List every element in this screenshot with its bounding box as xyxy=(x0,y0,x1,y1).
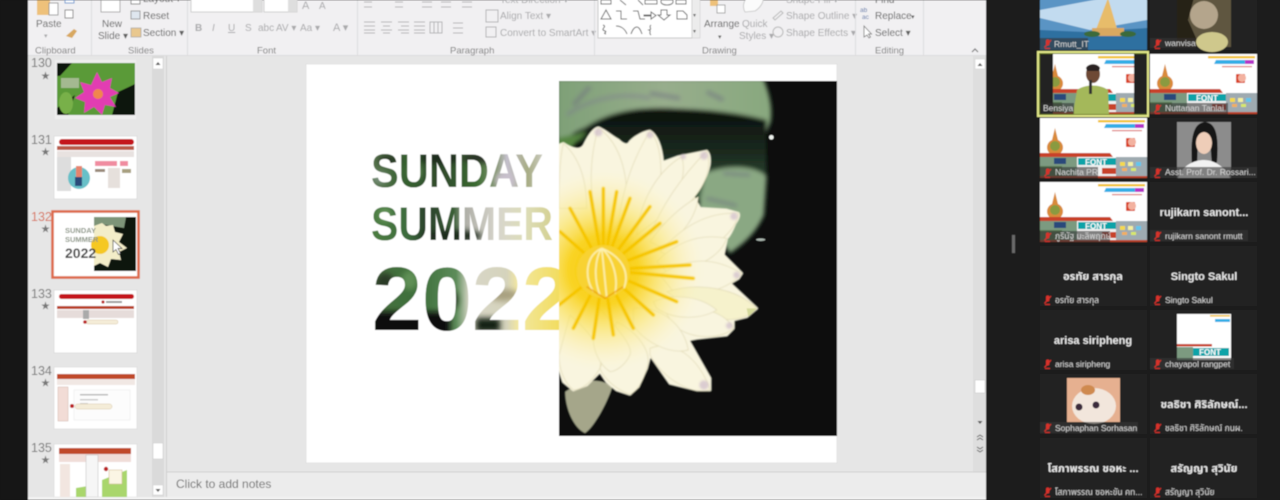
editing group: Editing xyxy=(875,46,904,56)
tile: Thai name 2: ชลธิชา ศิริลักษณ์... xyxy=(1160,399,1248,411)
notes bar xyxy=(167,472,986,497)
tile: Thai name 4: สรัญญา สุวินัย xyxy=(1170,463,1238,475)
editing group: Replace xyxy=(875,11,912,22)
thumbnail 135: ribbon tutorial slide: 135 xyxy=(31,441,52,455)
thumbnail 134: ribbon tutorial slide: 134 xyxy=(31,364,52,378)
tile: rujikarn sanont rmutt xyxy=(1150,182,1257,242)
headline with photo fill: SUMMER xyxy=(371,197,553,250)
tile: chayapol rangpet xyxy=(1150,310,1257,370)
thumbnail 130: pink lotus: ★ xyxy=(41,71,50,81)
drawing group: shapes gallery: Shape Effects ▾ xyxy=(786,28,856,39)
tile: Rmutt_IT: Rmutt_IT xyxy=(1054,39,1089,49)
slides group: Reset xyxy=(143,11,169,22)
tile: arisa siripheng xyxy=(1040,310,1147,370)
font group: I xyxy=(212,23,215,34)
thumbnail 134: ribbon tutorial slide: ★ xyxy=(41,378,50,388)
petals xyxy=(559,128,757,394)
tile: rujikarn sanont rmutt: rujikarn sanont rmutt xyxy=(1165,231,1243,241)
clipboard group: Paste xyxy=(36,19,62,30)
editing group xyxy=(860,0,978,56)
font group: U xyxy=(228,23,235,34)
slide: Sunday Summer 2022 xyxy=(306,64,837,463)
thumbnail 135: ribbon tutorial slide: ★ xyxy=(41,455,50,465)
right scrollbar xyxy=(973,56,986,472)
drawing group: shapes gallery: Arrange xyxy=(704,19,740,30)
font group xyxy=(191,0,349,56)
tile: Nachita PR: FONT xyxy=(1085,158,1107,167)
font group: Font xyxy=(257,46,276,56)
font group: S xyxy=(245,23,252,34)
drawing group: shapes gallery: Shape Outline ▾ xyxy=(786,11,857,22)
thumbnail 133: red header slide xyxy=(31,287,137,353)
tile: Singto Sakul: Singto Sakul xyxy=(1171,271,1237,283)
tile: Singto Sakul xyxy=(1150,246,1257,306)
thumbnail 131: red header slide xyxy=(31,133,137,199)
editing canvas xyxy=(28,56,986,500)
paragraph group xyxy=(364,0,596,56)
thumbnail 131: red header slide: 131 xyxy=(31,133,52,147)
left scrollbar xyxy=(153,58,163,495)
editing group: ab xyxy=(860,7,868,14)
slides group: New xyxy=(102,19,123,30)
tile: Rmutt_IT xyxy=(1040,0,1147,50)
leaf xyxy=(557,78,771,253)
slides group: Section ▾ xyxy=(143,28,184,39)
tile: arisa siripheng: arisa siripheng xyxy=(1055,359,1111,369)
tile: Thai name 4 xyxy=(1150,438,1257,498)
ribbon xyxy=(28,0,986,56)
tile: participant slide share: ภูรินัฐ มะลิพฤกษ์ xyxy=(1055,231,1112,242)
font group: A xyxy=(302,0,310,12)
tile: chayapol rangpet: FONT xyxy=(1199,348,1221,357)
headline with photo fill: SUNDAY xyxy=(371,144,543,197)
thumbnail 132: selected slide: ★ xyxy=(41,224,50,234)
thumbnail 132: selected slide: SUNDAY xyxy=(65,226,96,235)
editing group: Select ▾ xyxy=(875,28,911,39)
paragraph group: Paragraph xyxy=(450,46,494,56)
headline with photo fill: 2022 xyxy=(372,250,572,350)
editing group: ac xyxy=(862,14,870,21)
editing group: ▾ xyxy=(911,14,915,21)
thumbnail 134: ribbon tutorial slide xyxy=(31,364,137,429)
tile: participant slide share xyxy=(1040,182,1147,242)
tile: Singto Sakul: Singto Sakul xyxy=(1165,295,1213,305)
font group: AV ▾ xyxy=(276,23,296,34)
thumbnail 132: selected slide: SUMMER xyxy=(65,235,99,244)
drawing group: shapes gallery: ▾ xyxy=(718,34,722,41)
thumbnail 132: selected slide: 132 xyxy=(31,210,52,224)
tile: Sophaphan Sorhasan xyxy=(1040,374,1147,434)
tile: wanvisa: wanvisa xyxy=(1164,38,1196,48)
tile: Nuttanan Tanlai: Nuttanan Tanlai xyxy=(1165,103,1224,113)
thumbnail 132: selected slide: 2022 xyxy=(65,245,96,261)
tile: Thai name 2 xyxy=(1150,374,1257,434)
tile: Thai name 3 xyxy=(1040,438,1147,498)
tile: Thai name 3: โสภาพรรณ ซอหะขัน คท... xyxy=(1055,487,1142,497)
drawing group: shapes gallery: ▾ xyxy=(693,29,696,35)
sepal xyxy=(565,380,613,433)
font group: Aa ▾ xyxy=(300,23,320,34)
tile: participant slide share: FONT xyxy=(1085,222,1107,231)
headline with photo fill xyxy=(371,144,572,350)
font group: abc xyxy=(258,23,274,34)
tile: Thai name 1: อรทัย สารกุล xyxy=(1055,295,1099,305)
tile: wanvisa xyxy=(1150,0,1257,52)
paragraph group: Align Text ▾ xyxy=(500,11,551,22)
tile: Nuttanan Tanlai xyxy=(1150,54,1257,114)
tile: Nachita PR xyxy=(1040,118,1147,178)
tile: Thai name 4: สรัญญา สุวินัย xyxy=(1165,487,1215,497)
yellow heart xyxy=(558,180,694,361)
tile: Nuttanan Tanlai: FONT xyxy=(1196,94,1218,103)
clipboard group xyxy=(35,0,77,56)
tile: Bensiya, active speaker xyxy=(1038,52,1148,116)
flower center xyxy=(577,245,630,298)
thumbnail 132: selected slide xyxy=(31,210,138,278)
petal tips xyxy=(594,128,740,390)
tile: arisa siripheng: arisa siripheng xyxy=(1054,335,1132,347)
tile: Sophaphan Sorhasan: Sophaphan Sorhasan xyxy=(1055,423,1138,433)
paragraph group: Convert to SmartArt ▾ xyxy=(500,28,596,39)
drawing group: shapes gallery: ▾ xyxy=(693,13,696,19)
tile: rujikarn sanont rmutt: rujikarn sanont... xyxy=(1160,207,1248,219)
clipboard group: ▾ xyxy=(44,33,48,40)
clipboard group: Clipboard xyxy=(35,46,76,56)
notes bar: Click to add notes xyxy=(176,477,271,491)
drawing group: shapes gallery: Drawing xyxy=(702,46,737,56)
font group: B xyxy=(195,23,202,34)
tile: Thai name 3: โสภาพรรณ ชอหะ ... xyxy=(1047,463,1139,475)
font group: A xyxy=(319,1,326,12)
font group: A ▾ xyxy=(333,22,349,34)
tile: Thai name 2: ชลธิชา ศิริลักษณ์ กนผ. xyxy=(1165,423,1243,433)
slide thumbnail pane xyxy=(28,56,167,497)
participant panel xyxy=(986,0,1280,500)
tile: Thai name 1 xyxy=(1040,246,1147,306)
tile: chayapol rangpet: chayapol rangpet xyxy=(1165,359,1231,369)
thumbnail 130: pink lotus xyxy=(31,56,136,119)
tile: Thai name 1: อรทัย สารกุล xyxy=(1063,271,1123,283)
slides group: Slide ▾ xyxy=(98,31,128,42)
slides group xyxy=(98,0,184,56)
thumbnail 133: red header slide: ★ xyxy=(41,301,50,311)
tile: Nachita PR: Nachita PR xyxy=(1055,167,1098,177)
thumbnail 133: red header slide: 133 xyxy=(31,287,52,301)
drawing group: shapes gallery xyxy=(598,0,857,56)
photo: water lily xyxy=(558,80,838,437)
drawing group: shapes gallery: Styles ▾ xyxy=(739,31,774,42)
tile: Asst. Prof. Dr. Rossari... xyxy=(1150,118,1257,178)
slides group: Slides xyxy=(128,46,154,56)
drawing group: shapes gallery: Quick xyxy=(742,19,769,30)
thumbnail 135: ribbon tutorial slide xyxy=(31,441,137,497)
tile: Asst. Prof. Dr. Rossari...: Asst. Prof. Dr. Rossari... xyxy=(1165,167,1256,177)
flower xyxy=(559,128,757,394)
thumbnail 131: red header slide: ★ xyxy=(41,147,50,157)
tile: Bensiya, active speaker: Bensiya xyxy=(1043,103,1074,113)
thumbnail 130: pink lotus: 130 xyxy=(31,56,52,70)
